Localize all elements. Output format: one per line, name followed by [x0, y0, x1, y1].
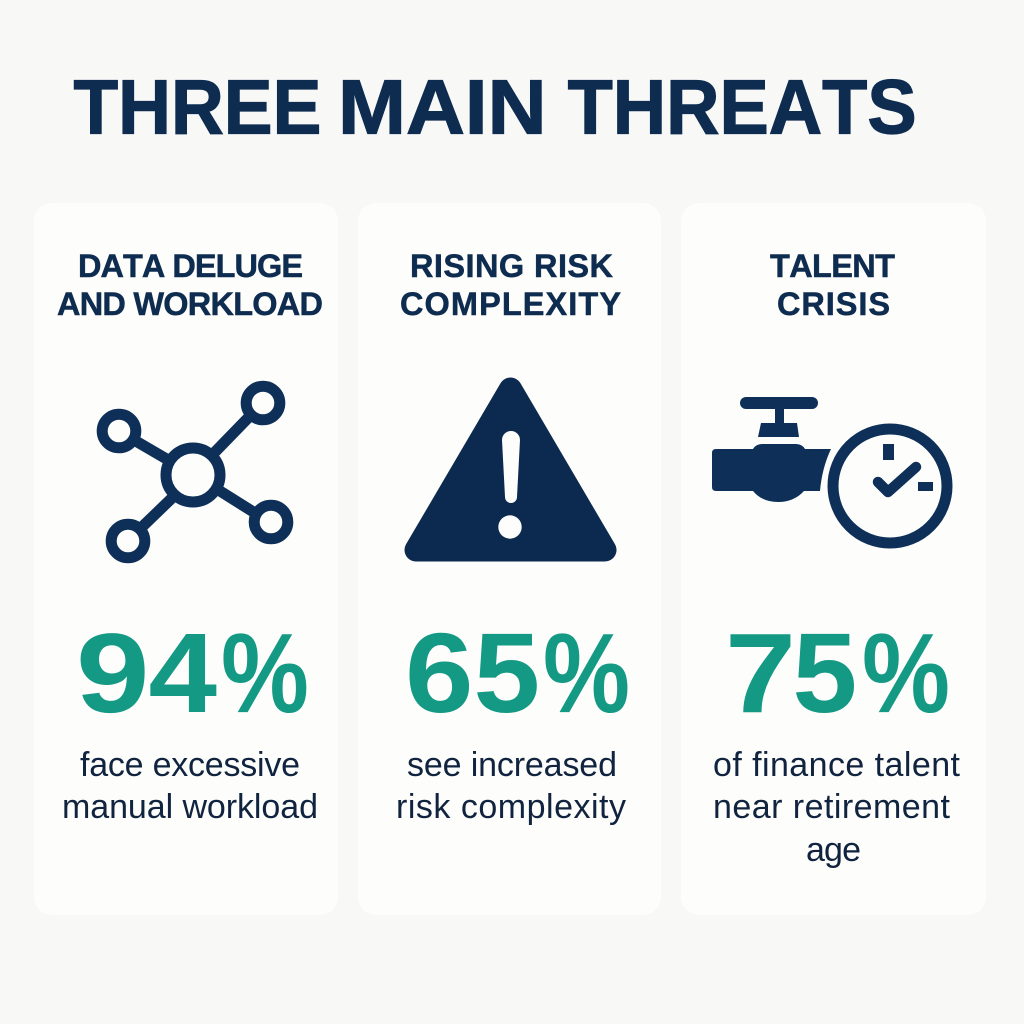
icon: warning triangle: [416, 389, 605, 550]
label: finance talent: age: [806, 831, 861, 869]
statistic: 65%: 5: [474, 610, 540, 736]
heading: talent crisis: CRISIS: [777, 286, 890, 322]
heading: rising risk: COMPLEXITY: [400, 286, 621, 322]
heading: data deluge: DATA DELUGE: [78, 248, 303, 284]
label: finance talent: near retirement: [713, 788, 951, 826]
statistic: 75%: [725, 610, 950, 737]
statistic: 94%: 9: [76, 611, 150, 737]
statistic: 94%: 4: [148, 611, 217, 737]
label: risk complexity: see increased: [407, 746, 617, 784]
heading: rising risk: RISING RISK: [410, 248, 614, 284]
icon: valve and clock: [712, 397, 947, 543]
clock: [833, 429, 947, 543]
label: finance talent: [713, 746, 961, 869]
title: [74, 64, 917, 150]
title: THREE: [74, 64, 321, 150]
statistic: 94%: %: [221, 611, 309, 736]
statistic: 75%: 7: [725, 610, 796, 736]
valve: [712, 397, 831, 502]
label: manual workload: face excessive: [80, 746, 300, 784]
statistic: 65%: %: [543, 610, 630, 737]
panel: talent crisis: [681, 203, 986, 915]
statistic: 75%: 5: [792, 611, 857, 737]
statistic: 65%: 6: [405, 611, 474, 737]
title: MAIN: [338, 64, 547, 150]
label: manual workload: [62, 746, 318, 826]
panel: data deluge and workload: [34, 203, 338, 915]
statistic: 94%: [76, 611, 309, 737]
label: risk complexity: risk complexity: [396, 788, 626, 826]
heading: rising risk: [400, 248, 621, 322]
title: THREATS: [568, 64, 917, 150]
label: finance talent: of finance talent: [713, 746, 961, 784]
label: risk complexity: [396, 746, 626, 826]
heading: talent crisis: TALENT: [770, 248, 895, 284]
statistic: 75%: %: [862, 610, 950, 736]
heading: data deluge: AND WORKLOAD: [57, 286, 323, 322]
heading: talent crisis: [770, 248, 895, 322]
heading: data deluge: [57, 248, 323, 322]
panel: rising risk complexity: [358, 203, 661, 915]
icon: network nodes: [102, 386, 288, 558]
statistic: 65%: [405, 610, 630, 737]
label: manual workload: manual workload: [62, 788, 318, 826]
